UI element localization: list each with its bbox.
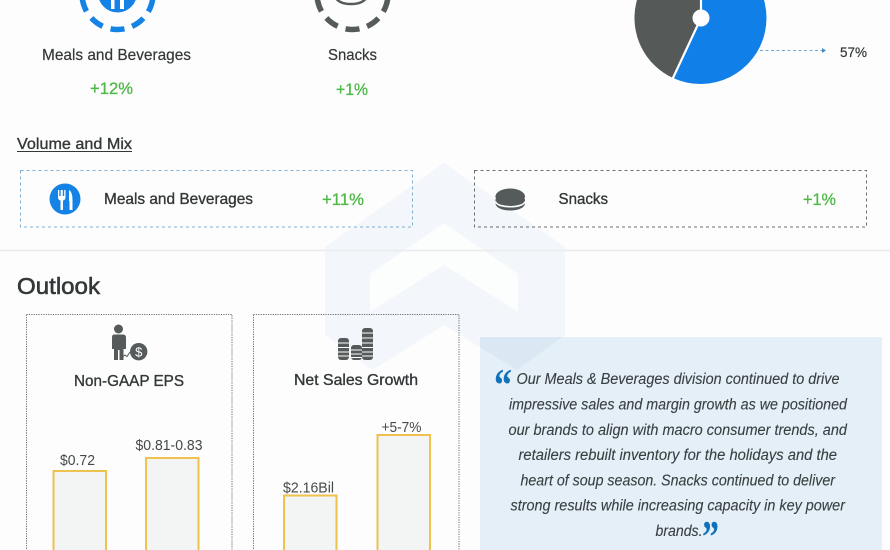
label: snacks: Snacks [328,47,377,64]
quote text [494,359,848,550]
heading: outlook: Outlook [17,273,100,299]
value: snacks volume: +1% [803,190,836,209]
quote text: heart of soup season. Snacks continued to deliver [520,472,836,490]
label: snacks: Snacks [558,191,608,208]
quote text: our brands to align with macro consumer trends, and [508,422,848,439]
bar: prior EPS: $0.72 [60,453,95,469]
panel: non-GAAP EPS [26,314,232,550]
opening quote mark: “ [494,359,512,410]
arrow: pie callout [760,48,826,53]
bar: outlook net sales [378,420,430,550]
quote text: strong results while increasing capacity in key power [510,498,846,514]
bar: prior net sales [283,480,336,550]
icon: person with dollar: $ [135,344,143,360]
panel: net sales growth [254,314,459,550]
icon: fork and knife [50,184,80,214]
icon: snacks dashed ring [311,0,394,36]
label: meals and beverages: Meals and Beverages [104,191,253,208]
label: meals and beverages: Meals and Beverages [42,47,191,64]
bar: prior net sales: $2.16Bil [283,480,334,496]
quote text: brands. [656,523,702,540]
title: net sales growth: Net Sales Growth [294,372,418,389]
quote text: retailers rebuilt inventory for the holidays and the [518,447,837,464]
icon: meals dashed ring [76,0,159,36]
value: snacks growth: +1% [336,80,368,99]
pie chart [634,0,766,84]
icon: coin stacks [338,328,373,360]
bar: outlook net sales: +5-7% [382,420,422,436]
quote text: Our Meals & Beverages division continued to drive [516,371,840,388]
title: non-GAAP EPS: Non-GAAP EPS [74,373,184,390]
heading: volume and mix: Volume and Mix [17,136,132,153]
value: meals volume: +11% [322,190,364,209]
icon: snack [495,188,525,210]
quote text: impressive sales and margin growth as we positioned [509,396,848,414]
bar: outlook EPS: $0.81-0.83 [136,438,202,454]
bar: outlook EPS [136,438,202,550]
value: pie share: 57% [840,44,867,60]
icon: person with dollar [112,324,147,360]
panel: meals and beverages volume [20,170,412,227]
watermark: hexagon logo [325,163,565,370]
panel: quote background [480,337,882,550]
panel: snacks volume [474,170,866,227]
bar: prior EPS [54,453,106,550]
value: meals growth: +12% [90,79,133,98]
